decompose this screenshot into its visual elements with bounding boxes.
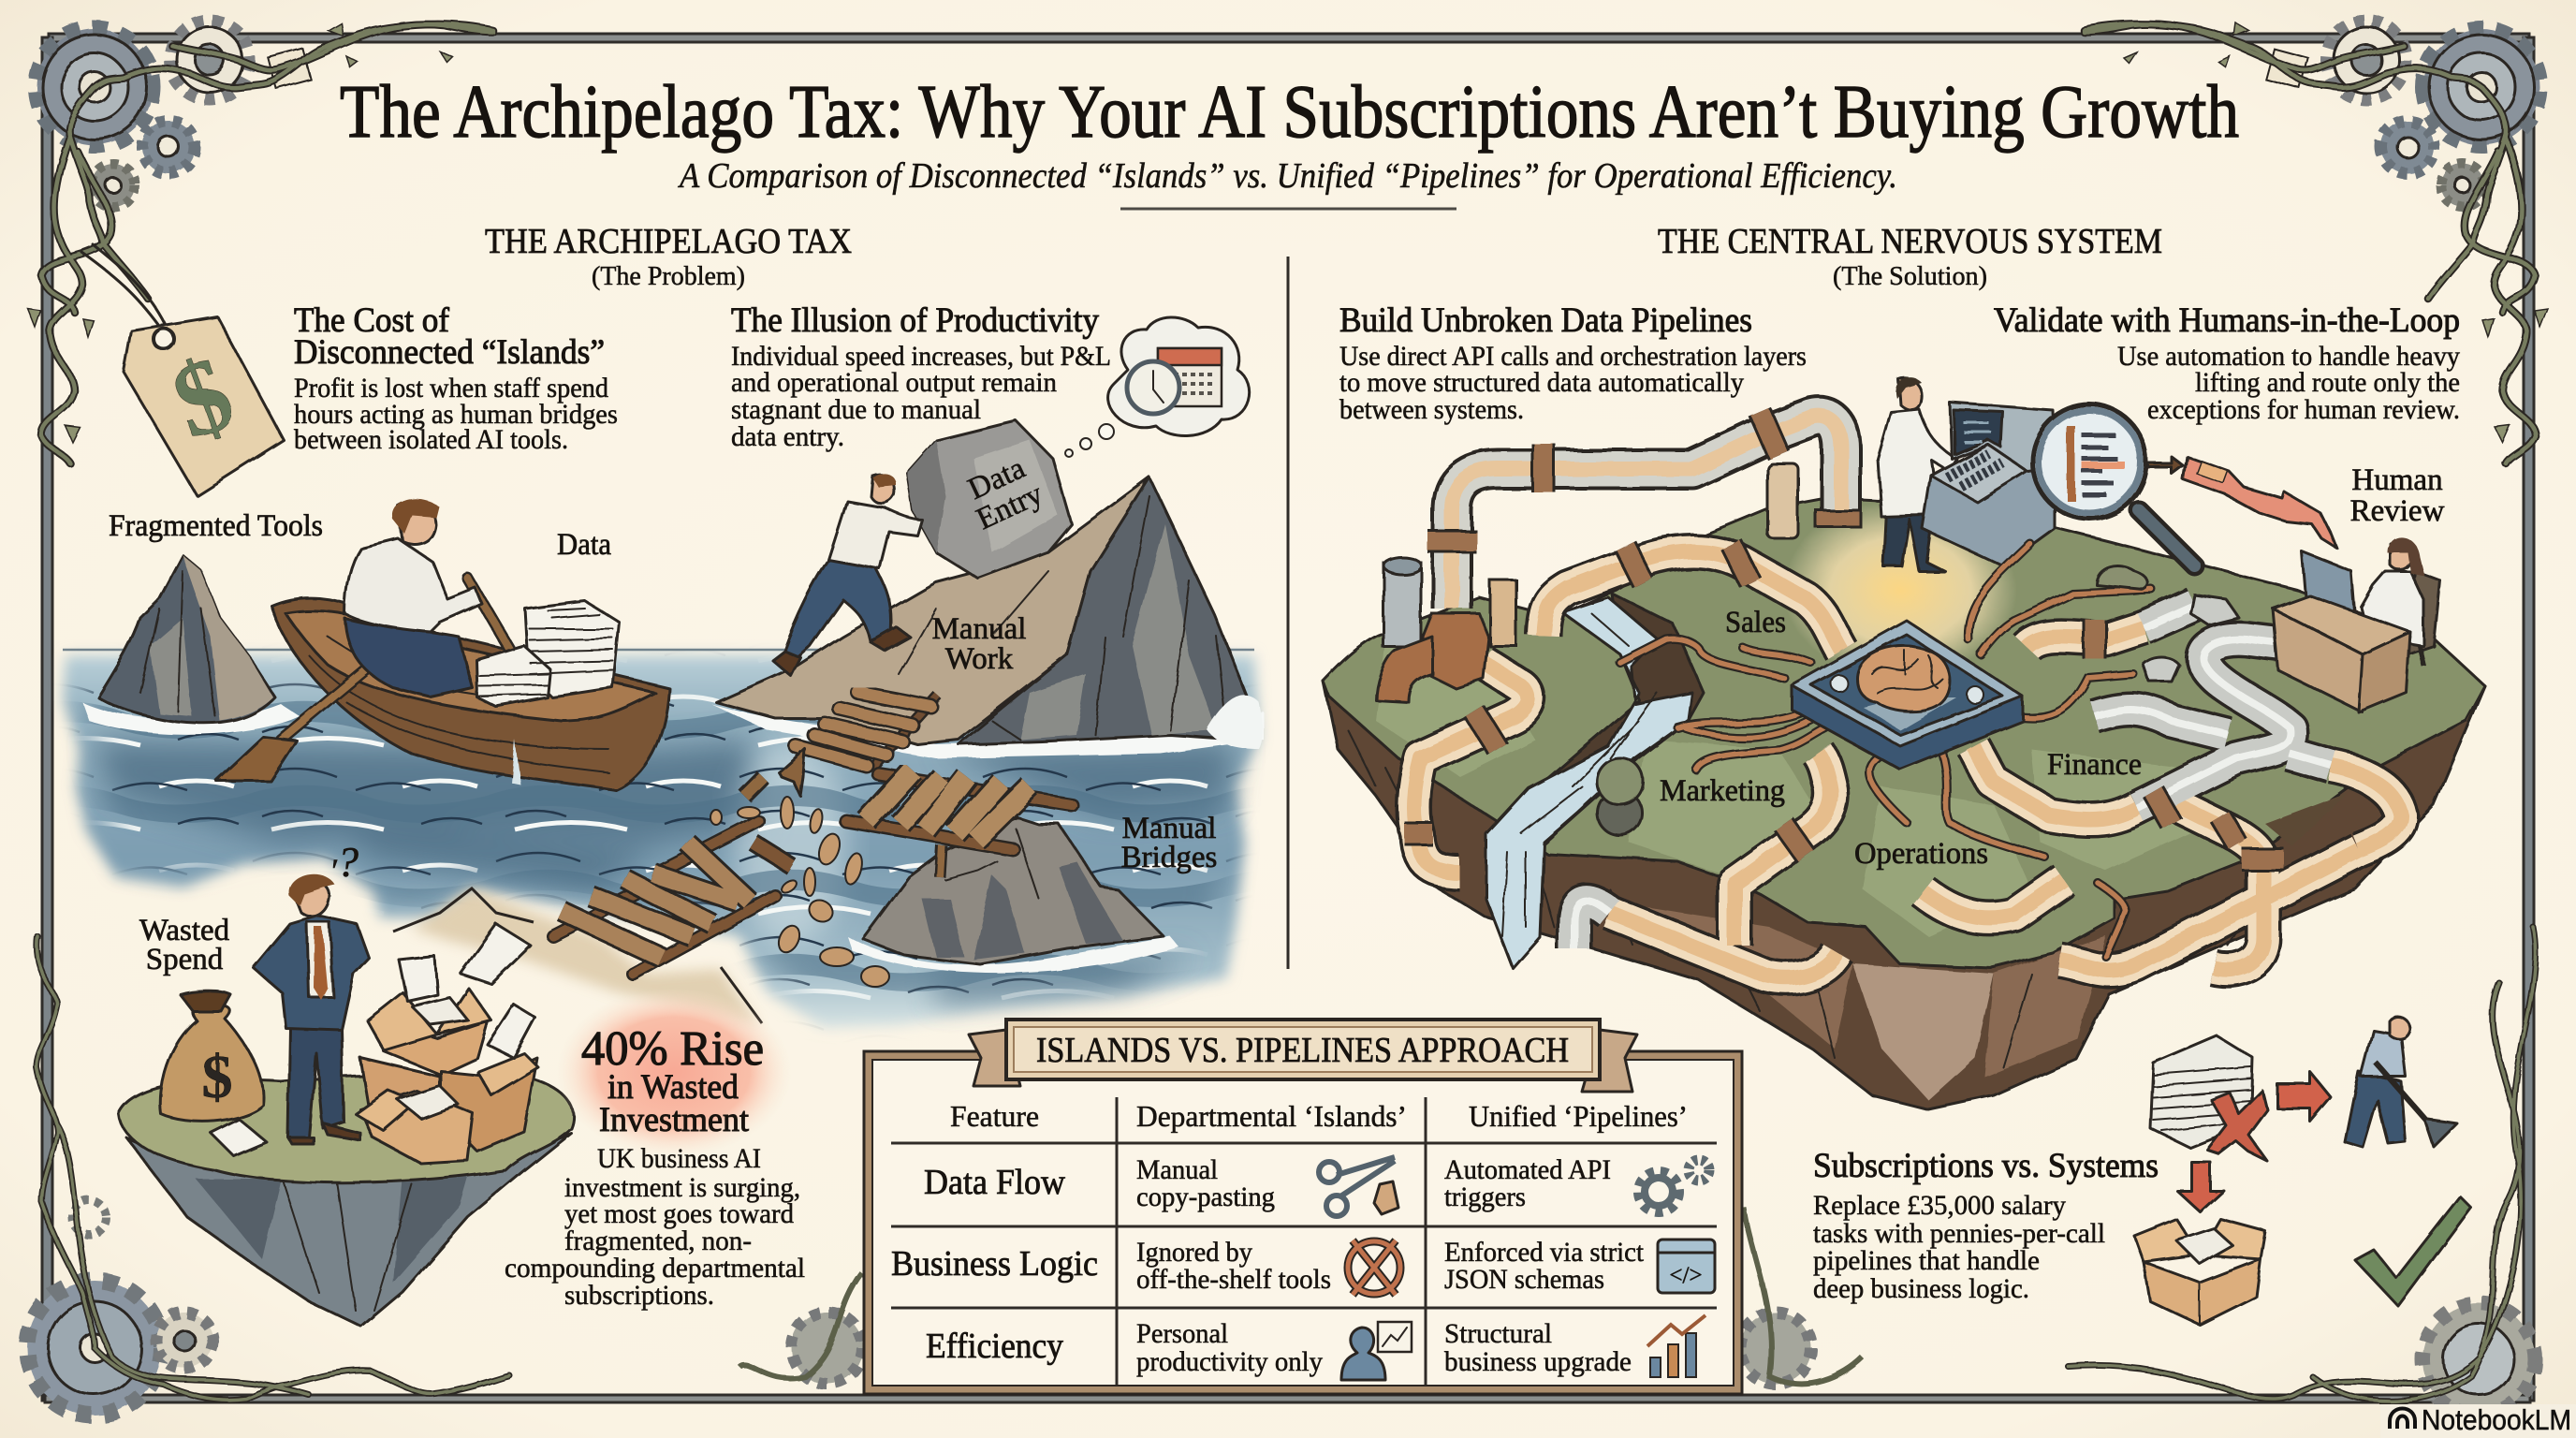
icon: gears xyxy=(1641,1160,1709,1210)
text: the cost of disconnected islands: The Cost of xyxy=(294,301,450,340)
text: the cost of disconnected islands xyxy=(294,301,618,455)
label: data: Data xyxy=(557,528,611,562)
label: wasted spend: Spend xyxy=(146,943,224,976)
arrow: red right xyxy=(2277,1072,2331,1122)
right section heading xyxy=(1658,222,2162,291)
row: efficiency xyxy=(926,1315,1705,1380)
question marks: ′ xyxy=(329,852,338,889)
computer console xyxy=(1923,403,2055,566)
question marks: ? xyxy=(337,838,359,886)
text: subscriptions vs systems xyxy=(1813,1147,2159,1304)
text: the illusion of productivity: The Illusion of Productivity xyxy=(731,301,1099,340)
row: data flow xyxy=(924,1154,1709,1216)
label: human review xyxy=(2350,463,2445,528)
cardboard boxes xyxy=(211,924,538,1164)
row: efficiency: business upgrade xyxy=(1444,1346,1632,1377)
icon: code window: </> xyxy=(1669,1263,1703,1288)
sea xyxy=(53,647,1267,1035)
text: the illusion of productivity xyxy=(731,301,1111,452)
table grid xyxy=(891,1097,1717,1385)
label: data entry: Data xyxy=(963,451,1031,506)
icon: price tag xyxy=(82,245,284,495)
left section heading: THE ARCHIPELAGO TAX xyxy=(485,222,852,261)
subtitle: A Comparison of Disconnected “Islands” vs. Unified “Pipelines” for Operational Efficiency. xyxy=(677,156,1897,196)
middle broken bridge xyxy=(846,770,1072,877)
stat: 40 percent rise: 40% Rise xyxy=(581,1022,764,1076)
stat: 40 percent rise: Investment xyxy=(599,1101,750,1139)
row: business logic: off-the-shelf tools xyxy=(1136,1264,1331,1295)
icon: money bag: $ xyxy=(202,1043,232,1111)
row: data flow: triggers xyxy=(1444,1181,1526,1212)
upper broken bridge xyxy=(779,693,938,796)
big rock: manual work xyxy=(711,477,1264,758)
text: uk investment: compounding departmental xyxy=(505,1253,805,1284)
table frame xyxy=(864,1051,1742,1394)
icon: money bag xyxy=(160,990,264,1122)
icon: thought cloud with clock and calendar xyxy=(1065,317,1250,457)
table header row: Departmental ‘Islands’ xyxy=(1136,1099,1407,1133)
title: The Archipelago Tax: Why Your AI Subscriptions Aren’t Buying Growth xyxy=(340,71,2239,154)
text: the illusion of productivity: data entry. xyxy=(731,421,844,452)
floating island: wasted spend xyxy=(119,1076,574,1327)
label: sales: Sales xyxy=(1725,606,1786,639)
heading divider xyxy=(1120,208,1456,210)
label: fragmented tools: Fragmented Tools xyxy=(109,509,323,543)
label: human review: Human xyxy=(2351,463,2443,497)
text: subscriptions vs systems: pipelines that handle xyxy=(1813,1245,2040,1276)
text: the cost of disconnected islands: Profit is lost when staff spend xyxy=(294,373,608,404)
central divider xyxy=(1286,257,1290,969)
text: uk investment: yet most goes toward xyxy=(564,1198,794,1229)
question marks xyxy=(329,838,359,889)
row: business logic: Enforced via strict xyxy=(1444,1237,1645,1268)
text: build unbroken data pipelines: between systems. xyxy=(1339,394,1524,425)
stat: 40 percent rise xyxy=(581,1022,764,1139)
icon: rising bar chart xyxy=(1647,1315,1705,1377)
left section heading: (The Problem) xyxy=(592,261,745,291)
label: manual work: Manual xyxy=(932,612,1026,646)
right section heading: THE CENTRAL NERVOUS SYSTEM xyxy=(1658,222,2162,261)
right section heading: (The Solution) xyxy=(1833,261,1987,291)
text: subscriptions vs systems: tasks with pennies-per-call xyxy=(1813,1218,2105,1249)
text: subscriptions vs systems: Replace £35,000 salary xyxy=(1813,1190,2066,1221)
text: uk investment: UK business AI xyxy=(597,1143,761,1174)
top left gears xyxy=(28,21,492,463)
text: uk investment: investment is surging, xyxy=(564,1172,800,1203)
left panel illustrations xyxy=(53,242,1267,1328)
row: efficiency: Personal xyxy=(1136,1318,1228,1349)
text: the cost of disconnected islands: between isolated AI tools. xyxy=(294,424,568,455)
exception ribbon xyxy=(2183,456,2336,548)
row: business logic: Ignored by xyxy=(1136,1237,1252,1268)
falling coins xyxy=(710,797,889,987)
label: marketing: Marketing xyxy=(1660,774,1785,808)
bush and pipe stub xyxy=(2097,566,2239,682)
label: data entry: Entry xyxy=(972,477,1048,536)
label: manual work: Work xyxy=(945,642,1014,676)
glow above chip xyxy=(1783,501,2017,679)
text: build unbroken data pipelines xyxy=(1339,301,1807,425)
row: data flow: copy-pasting xyxy=(1136,1181,1275,1212)
icon: green check mark xyxy=(2355,1196,2471,1306)
wasted investment glow xyxy=(557,988,791,1156)
label: manual bridges: Bridges xyxy=(1121,841,1217,874)
text: build unbroken data pipelines: Build Unbroken Data Pipelines xyxy=(1339,301,1752,340)
paper stacks xyxy=(476,601,620,707)
text: the cost of disconnected islands: hours acting as human bridges xyxy=(294,399,618,430)
man pushing boulder xyxy=(772,473,922,676)
tree xyxy=(1597,758,1644,835)
text: validate with humans in the loop: exceptions for human review. xyxy=(2147,394,2460,425)
stat: 40 percent rise: in Wasted xyxy=(607,1068,739,1107)
copper pipe collars xyxy=(1404,412,2284,859)
row: efficiency: Efficiency xyxy=(926,1327,1063,1366)
scientist xyxy=(1878,377,1956,571)
icon: open box with documents xyxy=(2134,1219,2265,1325)
pipes network xyxy=(1414,417,2401,978)
row: efficiency: Structural xyxy=(1444,1318,1552,1349)
floating island: central nervous system xyxy=(1324,498,2484,1109)
label: wasted spend xyxy=(139,914,230,976)
label: data entry xyxy=(959,449,1048,536)
bottom left gears and vines xyxy=(27,936,509,1416)
text: validate with humans in the loop xyxy=(1994,301,2460,425)
top right gears xyxy=(2084,21,2548,463)
table ribbon banner: ISLANDS VS. PIPELINES APPROACH xyxy=(1036,1031,1569,1070)
icon: prohibited xyxy=(1348,1240,1400,1295)
text: subscriptions vs systems: Subscriptions vs. Systems xyxy=(1813,1147,2159,1185)
label: operations: Operations xyxy=(1854,837,1988,871)
icon: person with chart xyxy=(1341,1322,1412,1380)
arrow: magnifier to ribbon xyxy=(2148,457,2183,474)
label: human review: Review xyxy=(2350,494,2445,528)
label: manual bridges xyxy=(1121,812,1217,874)
text: the illusion of productivity: stagnant due to manual xyxy=(731,394,981,425)
table header row: Unified ‘Pipelines’ xyxy=(1469,1099,1688,1133)
text: validate with humans in the loop: Use automation to handle heavy xyxy=(2117,341,2460,372)
label: wasted spend: Wasted xyxy=(139,914,230,947)
left rock: fragmented tools xyxy=(82,555,300,735)
text: build unbroken data pipelines: to move structured data automatically xyxy=(1339,367,1744,398)
left section heading xyxy=(485,222,852,291)
table header row xyxy=(950,1099,1688,1133)
row: data flow: Data Flow xyxy=(924,1163,1066,1202)
desk and reviewer xyxy=(2273,536,2440,712)
text: the illusion of productivity: Individual speed increases, but P&L xyxy=(731,341,1111,372)
text: uk investment xyxy=(505,1143,805,1311)
row: business logic: JSON schemas xyxy=(1444,1264,1604,1295)
rowing boat xyxy=(271,598,669,790)
icon: code window xyxy=(1658,1240,1715,1293)
row: efficiency: productivity only xyxy=(1136,1346,1323,1377)
arrow: red down xyxy=(2177,1162,2224,1212)
row: data flow: Automated API xyxy=(1444,1154,1611,1185)
row: business logic xyxy=(891,1237,1715,1295)
rock under bridges xyxy=(847,817,1179,973)
label: finance: Finance xyxy=(2047,748,2142,782)
gears flanking the table xyxy=(739,1208,1863,1384)
label: manual work xyxy=(932,612,1026,676)
text: validate with humans in the loop: lifting and route only the xyxy=(2195,367,2460,398)
label: manual bridges: Manual xyxy=(1122,812,1216,845)
text: uk investment: fragmented, non- xyxy=(564,1225,752,1256)
text: the illusion of productivity: and operational output remain xyxy=(731,367,1057,398)
thin copper wires xyxy=(1620,544,2152,957)
row: business logic: Business Logic xyxy=(891,1244,1098,1284)
businessman xyxy=(254,874,369,1144)
AI chip with brain xyxy=(1792,621,2023,770)
oars xyxy=(216,579,524,781)
icon: cash stack xyxy=(2150,1035,2253,1148)
man rowing xyxy=(344,499,482,697)
boulder: data entry xyxy=(907,420,1072,579)
text: validate with humans in the loop: Validate with Humans-in-the-Loop xyxy=(1994,301,2460,340)
table header row: Feature xyxy=(950,1099,1039,1133)
lower broken bridge xyxy=(553,777,791,974)
text: the cost of disconnected islands: Disconnected “Islands” xyxy=(294,333,605,372)
river and waterfall xyxy=(1486,594,1704,968)
bottom-right workflow icons xyxy=(2134,1016,2471,1325)
right panel illustrations xyxy=(1324,377,2484,1109)
row: data flow: Manual xyxy=(1136,1154,1218,1185)
man with shovel xyxy=(2345,1016,2457,1148)
copper valves and tanks xyxy=(1376,463,1861,702)
table ribbon banner xyxy=(969,1020,1637,1092)
icon: price tag: $ xyxy=(158,335,247,462)
bottom right gears and vines xyxy=(2069,927,2536,1416)
icon: scissors and glue xyxy=(1319,1157,1398,1216)
icon: red X xyxy=(2207,1091,2267,1161)
lower beige shore xyxy=(393,888,762,1025)
text: build unbroken data pipelines: Use direct API calls and orchestration layers xyxy=(1339,341,1807,372)
text: uk investment: subscriptions. xyxy=(564,1280,714,1311)
icon: magnifying glass xyxy=(2032,404,2195,566)
text: subscriptions vs systems: deep business logic. xyxy=(1813,1273,2029,1304)
